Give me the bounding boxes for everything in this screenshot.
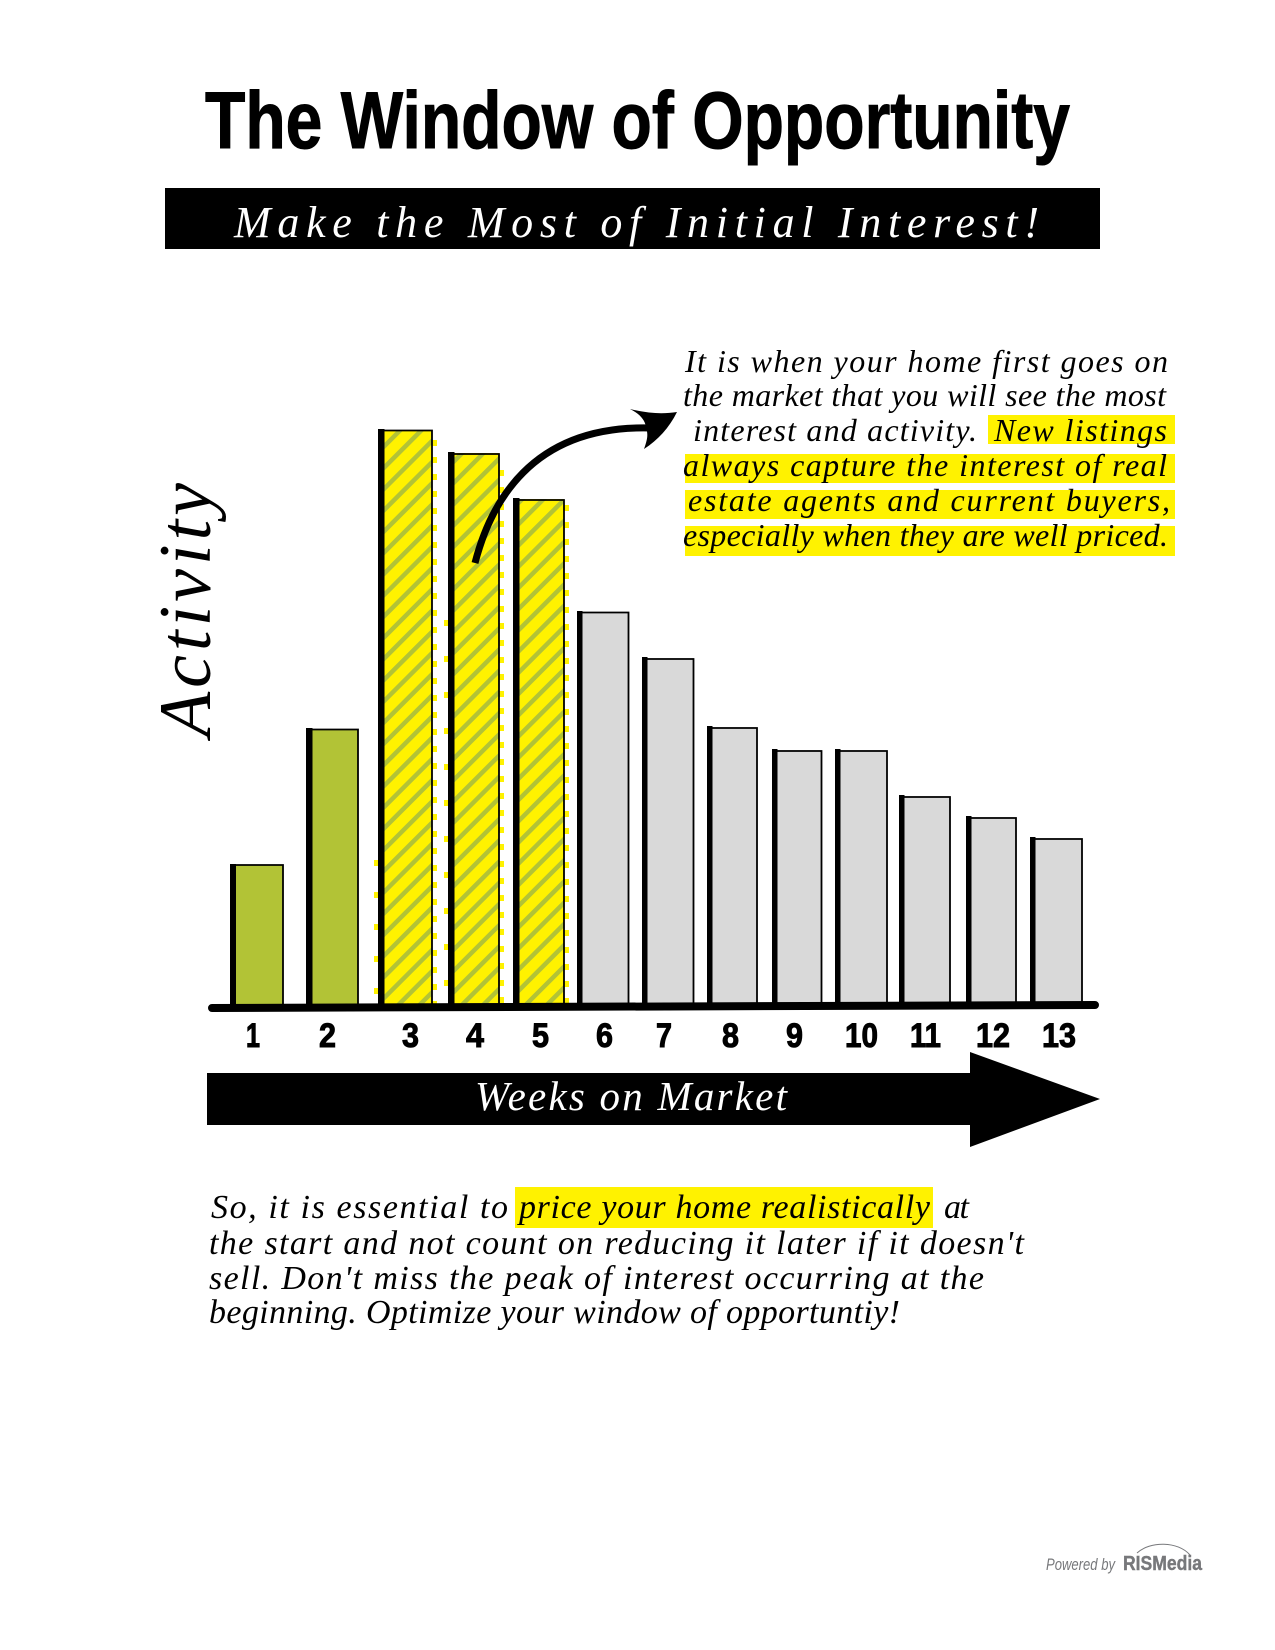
week numbers: 5 [532, 1017, 549, 1055]
closing text: the start and not count on reducing it later if it doesn't [209, 1225, 1026, 1262]
week numbers: 3 [402, 1017, 419, 1055]
callout text: interest and activity. [693, 412, 977, 448]
week numbers: 8 [722, 1017, 739, 1055]
week numbers: 6 [596, 1017, 613, 1055]
week numbers: 7 [656, 1017, 672, 1055]
arrow: weeks on market [207, 1052, 1100, 1147]
subtitle banner [165, 188, 1100, 249]
week numbers: 9 [786, 1017, 803, 1055]
week numbers: 4 [466, 1017, 484, 1055]
bar: week 11 [899, 795, 950, 1006]
week numbers [246, 1017, 1076, 1055]
closing highlight [515, 1187, 933, 1228]
footer credit [1046, 1544, 1203, 1575]
title: The Window of Opportunity [205, 76, 1070, 166]
callout text: estate agents and current buyers, [688, 482, 1170, 518]
bar: week 4 [446, 452, 502, 1006]
x-axis baseline [212, 1005, 1095, 1008]
bar: week 9 [772, 749, 822, 1006]
callout text [683, 343, 1175, 556]
bar: week 2 [306, 728, 358, 1006]
bar: week 12 [966, 816, 1016, 1006]
callout text: the market that you will see the most [683, 377, 1167, 413]
arrow: weeks on market: Weeks on Market [475, 1073, 789, 1119]
callout text: always capture the interest of real [683, 447, 1167, 483]
closing text: at [944, 1189, 971, 1226]
bar chart: activity by week on market [230, 429, 1082, 1006]
subtitle banner: Make the Most of Initial Interest! [233, 198, 1039, 247]
week numbers: 11 [910, 1017, 941, 1055]
arrow: from peak bars to callout [475, 409, 677, 563]
footer credit: RISMedia [1123, 1553, 1203, 1575]
week numbers: 13 [1042, 1017, 1076, 1055]
bar: week 8 [707, 726, 757, 1006]
bar: week 7 [642, 657, 694, 1006]
week numbers: 10 [845, 1017, 878, 1055]
y-axis label: Activity: Activity [145, 483, 227, 742]
bar: week 1 [230, 864, 283, 1006]
callout text: It is when your home first goes on [684, 343, 1168, 379]
closing text: price your home realistically [517, 1189, 931, 1226]
callout text: New listings [993, 412, 1167, 448]
callout highlights [685, 415, 1175, 556]
bar: week 10 [835, 749, 887, 1006]
bar: week 3 [376, 429, 434, 1006]
week numbers: 2 [319, 1017, 336, 1055]
week numbers: 12 [976, 1017, 1010, 1055]
bar: week 13 [1030, 837, 1082, 1006]
callout text: especially when they are well priced. [683, 517, 1168, 553]
footer credit: Powered by [1046, 1555, 1116, 1574]
closing text: sell. Don't miss the peak of interest occurring at the [209, 1260, 984, 1297]
closing text [209, 1187, 1026, 1331]
closing text: beginning. Optimize your window of opportuntiy! [209, 1294, 900, 1331]
bar: week 5 [513, 498, 566, 1006]
week numbers: 1 [246, 1017, 260, 1055]
bar: week 6 [577, 611, 629, 1006]
closing text: So, it is essential to [211, 1189, 508, 1226]
